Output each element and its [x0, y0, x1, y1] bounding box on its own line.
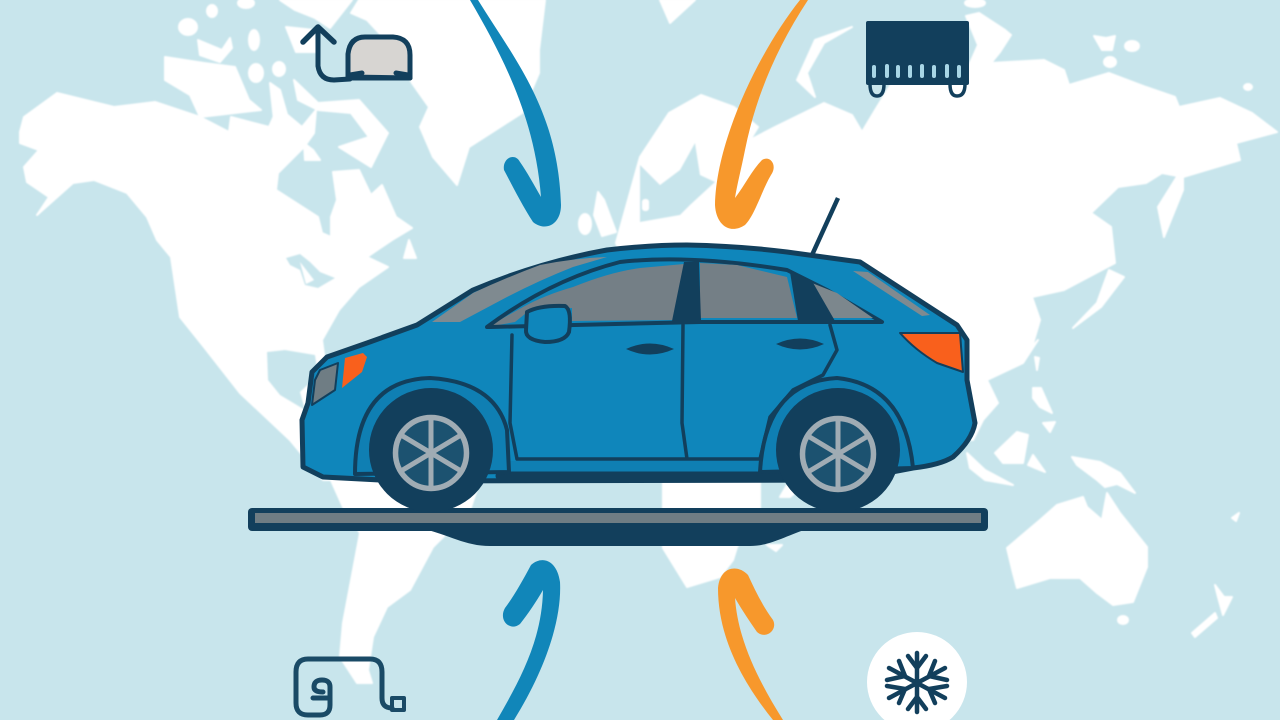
- rear wheel arch: [760, 378, 913, 472]
- pacific islets: [1232, 513, 1239, 521]
- arrow: blue bottom: [497, 560, 560, 720]
- sill: [510, 461, 770, 472]
- car: [302, 198, 975, 512]
- south america: [330, 478, 480, 683]
- door handles: [626, 344, 674, 354]
- philippines: [1033, 388, 1052, 413]
- australia: [1007, 493, 1147, 605]
- newfoundland: [404, 240, 416, 258]
- greenland: [351, 0, 545, 185]
- arctic islands: [165, 57, 261, 117]
- borneo: [995, 432, 1028, 463]
- sulawesi: [1028, 455, 1045, 472]
- eurasia: [616, 13, 1277, 440]
- icon: lift arrow and cover: [303, 27, 410, 80]
- icon: radiator: [866, 21, 969, 96]
- antenna: [812, 198, 838, 255]
- front wheel: [369, 388, 493, 512]
- car body: [302, 245, 975, 481]
- sumatra: [967, 453, 1013, 485]
- new zealand: [1215, 585, 1232, 615]
- front wheel arch: [355, 378, 509, 474]
- roof line: [487, 259, 882, 327]
- arrow: orange top: [715, 0, 808, 229]
- africa: [663, 480, 760, 587]
- platform: [248, 508, 988, 546]
- northern islands: [1094, 36, 1115, 50]
- mirror: [526, 306, 570, 342]
- madagascar: [767, 545, 782, 551]
- tail light: [900, 333, 963, 372]
- britain and ireland: [594, 192, 616, 236]
- north america: [20, 93, 412, 480]
- new guinea: [1072, 457, 1135, 493]
- rear quarter window: [812, 283, 873, 318]
- pillar: [672, 262, 701, 321]
- rear wheel: [776, 388, 900, 512]
- icon: snowflake badge: [867, 632, 967, 720]
- arrow: blue top: [470, 0, 561, 227]
- kamchatka: [1158, 167, 1183, 237]
- front indicator: [342, 353, 367, 388]
- arrow: orange bottom: [718, 568, 783, 720]
- japan: [1073, 270, 1124, 328]
- door lines: [510, 325, 837, 459]
- rear side window: [700, 263, 797, 318]
- rear window: [853, 271, 930, 316]
- icon: pipe: [296, 659, 404, 715]
- windshield: [432, 257, 607, 322]
- headlight: [312, 363, 338, 405]
- novaya zemlya: [797, 27, 852, 97]
- front side window: [487, 264, 684, 327]
- tasmania: [1118, 616, 1128, 624]
- map water details: [267, 143, 715, 410]
